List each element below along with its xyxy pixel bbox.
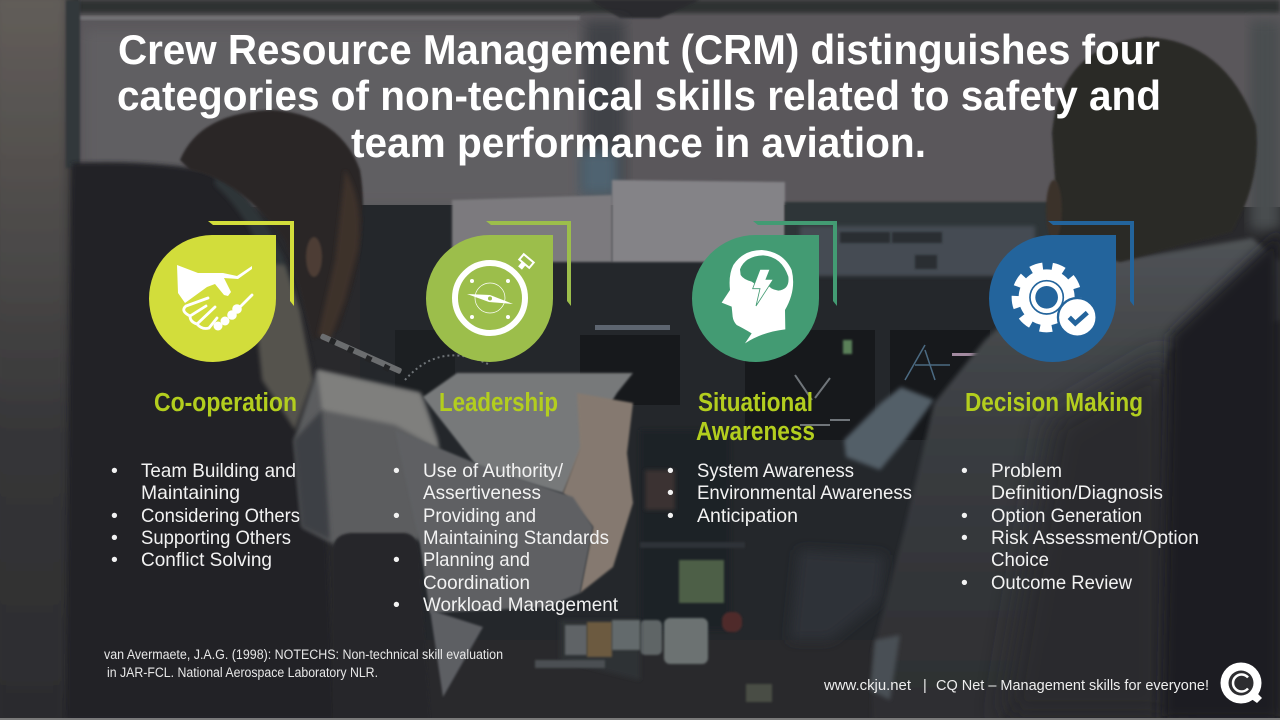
list: decision making skills: Outcome Review (991, 572, 1133, 594)
list: decision making skills: Choice (991, 549, 1049, 571)
list: leadership skills: Assertiveness (423, 482, 541, 504)
list: leadership skills: Planning and (423, 549, 530, 571)
list: decision making skills: Problem (991, 460, 1062, 482)
icon: decision making gear badge (989, 221, 1134, 362)
list: co-operation skills: • (111, 527, 118, 549)
list: leadership skills: • (393, 460, 400, 482)
list: situational awareness skills: • (667, 505, 674, 527)
list: leadership skills: • (393, 549, 400, 571)
list: leadership skills: • (393, 594, 400, 616)
list: co-operation skills: • (111, 505, 118, 527)
list: co-operation skills: • (111, 549, 118, 571)
list: co-operation skills: Conflict Solving (141, 549, 272, 571)
panel: co-operation (111, 221, 300, 571)
list: leadership skills: Maintaining Standards (423, 527, 609, 549)
list: co-operation skills: • (111, 460, 118, 482)
list: co-operation skills: Considering Others (141, 505, 300, 527)
title: Crew Resource Management (CRM) distinguishes four (118, 26, 1160, 73)
list: leadership skills: Providing and (423, 505, 536, 527)
list: situational awareness skills: Anticipation (697, 505, 798, 527)
panel: decision making (961, 221, 1199, 594)
footer text: CQ Net – Management skills for everyone! (936, 678, 1209, 694)
heading: co-operation: Co-operation (154, 389, 297, 417)
icon: leadership compass badge (426, 221, 571, 362)
list: decision making skills: • (961, 505, 968, 527)
list: leadership skills: Coordination (423, 572, 530, 594)
panel: leadership (393, 221, 619, 616)
list: decision making skills: • (961, 460, 968, 482)
icon: situational awareness head badge (692, 221, 837, 362)
list: decision making skills: • (961, 572, 968, 594)
list: situational awareness skills: • (667, 482, 674, 504)
list: co-operation skills: Supporting Others (141, 527, 291, 549)
list: co-operation skills: Maintaining (141, 482, 240, 504)
list: decision making skills: Definition/Diagnosis (991, 482, 1163, 504)
list: situational awareness skills (667, 460, 912, 527)
list: leadership skills: Use of Authority/ (423, 460, 564, 482)
list: leadership skills: • (393, 505, 400, 527)
right pilot (872, 238, 1280, 720)
list: leadership skills (393, 460, 619, 616)
list: situational awareness skills: • (667, 460, 674, 482)
heading: situational awareness (696, 389, 815, 446)
icon: co-operation handshake badge (149, 221, 294, 362)
list: decision making skills: Option Generation (991, 505, 1142, 527)
heading: situational awareness: Situational (698, 389, 813, 417)
footer text: www.ckju.net (823, 678, 911, 694)
title: categories of non-technical skills related to safety and (117, 72, 1161, 119)
list: decision making skills: Risk Assessment/Option (991, 527, 1199, 549)
list: decision making skills: • (961, 527, 968, 549)
list: decision making skills (961, 460, 1199, 594)
heading: leadership: Leadership (439, 389, 558, 417)
citation (104, 647, 503, 680)
list: situational awareness skills: System Awareness (697, 460, 854, 482)
heading: situational awareness: Awareness (696, 418, 815, 446)
panel: situational awareness (667, 221, 912, 527)
left pilot (66, 162, 335, 720)
instrument panel (360, 205, 1020, 640)
icon: CQ logo (1220, 662, 1262, 704)
list: leadership skills: Workload Management (423, 594, 619, 616)
footer text: | (923, 678, 927, 694)
list: situational awareness skills: Environmental Awareness (697, 482, 912, 504)
citation: in JAR-FCL. National Aerospace Laboratory NLR. (107, 665, 378, 680)
citation: van Avermaete, J.A.G. (1998): NOTECHS: Non-technical skill evaluation (104, 647, 503, 662)
title (117, 26, 1161, 166)
heading: decision making: Decision Making (965, 389, 1143, 417)
list: co-operation skills: Team Building and (141, 460, 296, 482)
title: team performance in aviation. (351, 119, 926, 166)
list: co-operation skills (111, 460, 300, 571)
